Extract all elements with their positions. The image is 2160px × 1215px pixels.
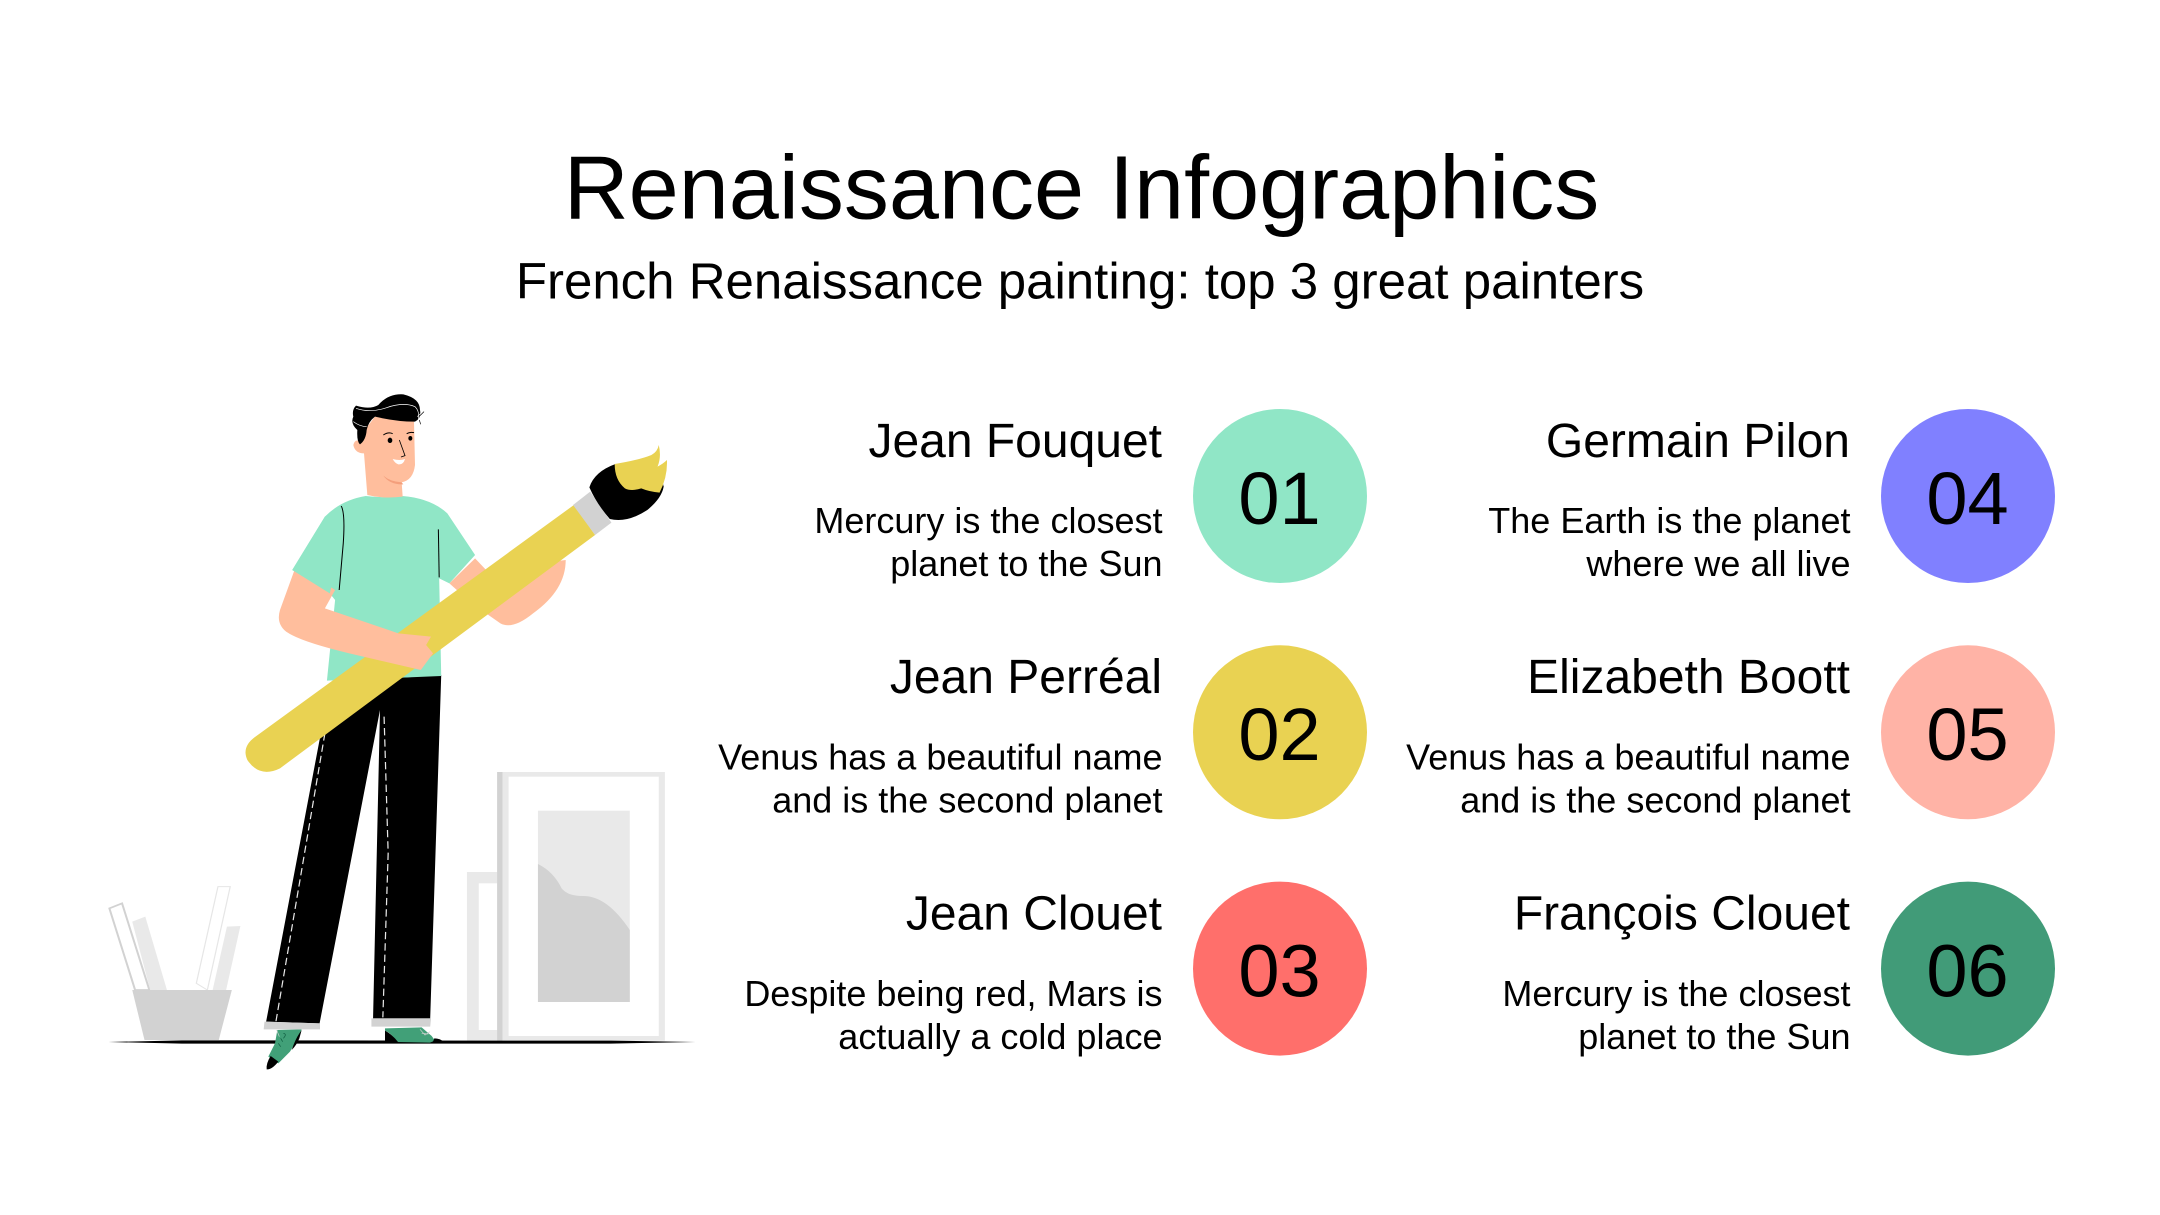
subtitle: French Renaissance painting: top 3 great painters (516, 252, 1644, 309)
heading: Elizabeth Boott (1527, 651, 1850, 704)
arm holding brush (279, 565, 433, 670)
heading: François Clouet (1514, 888, 1850, 940)
number circle (1881, 409, 2055, 583)
illustration: lower scene (109, 772, 696, 1044)
item 01: Jean Fouquet (814, 409, 1367, 584)
description: planet to the Sun (1578, 1016, 1850, 1057)
ground line (109, 1040, 696, 1044)
illustration: upper body (246, 445, 667, 772)
icon: shoes (267, 1027, 444, 1069)
heading: Jean Clouet (906, 888, 1162, 940)
hand behind brush (449, 558, 566, 625)
trousers (264, 675, 441, 1029)
head (352, 394, 424, 498)
item 03: Jean Clouet (744, 882, 1367, 1057)
number circle (1193, 409, 1367, 583)
title: Renaissance Infographics (564, 138, 1599, 238)
icon: stacked picture frames (467, 772, 665, 1041)
number circle: 05 (1926, 693, 2009, 776)
item 04: Germain Pilon (1488, 409, 2055, 584)
heading: Jean Fouquet (868, 415, 1162, 468)
description: Venus has a beautiful name (1406, 736, 1850, 778)
number circle: 06 (1926, 930, 2009, 1012)
item 05: Elizabeth Boott (1406, 645, 2055, 820)
description: Venus has a beautiful name (718, 736, 1162, 778)
illustration: painter with brush (109, 394, 696, 1069)
description: Mercury is the closest (1502, 973, 1850, 1014)
description: where we all live (1585, 543, 1850, 584)
description: Mercury is the closest (814, 500, 1162, 541)
number circle: 01 (1238, 457, 1321, 540)
description: The Earth is the planet (1488, 500, 1850, 541)
description: and is the second planet (1460, 780, 1850, 820)
description: actually a cold place (838, 1016, 1162, 1057)
item 02: Jean Perréal (718, 645, 1367, 820)
item 06: François Clouet (1502, 882, 2055, 1057)
number circle (1881, 882, 2055, 1056)
number circle: 03 (1238, 930, 1321, 1012)
icon: brush pot with pencils (109, 887, 240, 1040)
heading: Jean Perréal (890, 651, 1162, 704)
number circle: 02 (1238, 693, 1321, 776)
heading: Germain Pilon (1546, 415, 1850, 468)
paint brush (246, 445, 667, 772)
number circle: 04 (1926, 457, 2009, 540)
description: Despite being red, Mars is (744, 973, 1162, 1014)
number circle (1881, 645, 2055, 819)
t-shirt (292, 496, 475, 681)
description: and is the second planet (772, 780, 1162, 820)
description: planet to the Sun (890, 543, 1162, 584)
shirt sleeve over arm (292, 506, 344, 593)
number circle (1193, 882, 1367, 1056)
number circle (1193, 645, 1367, 819)
